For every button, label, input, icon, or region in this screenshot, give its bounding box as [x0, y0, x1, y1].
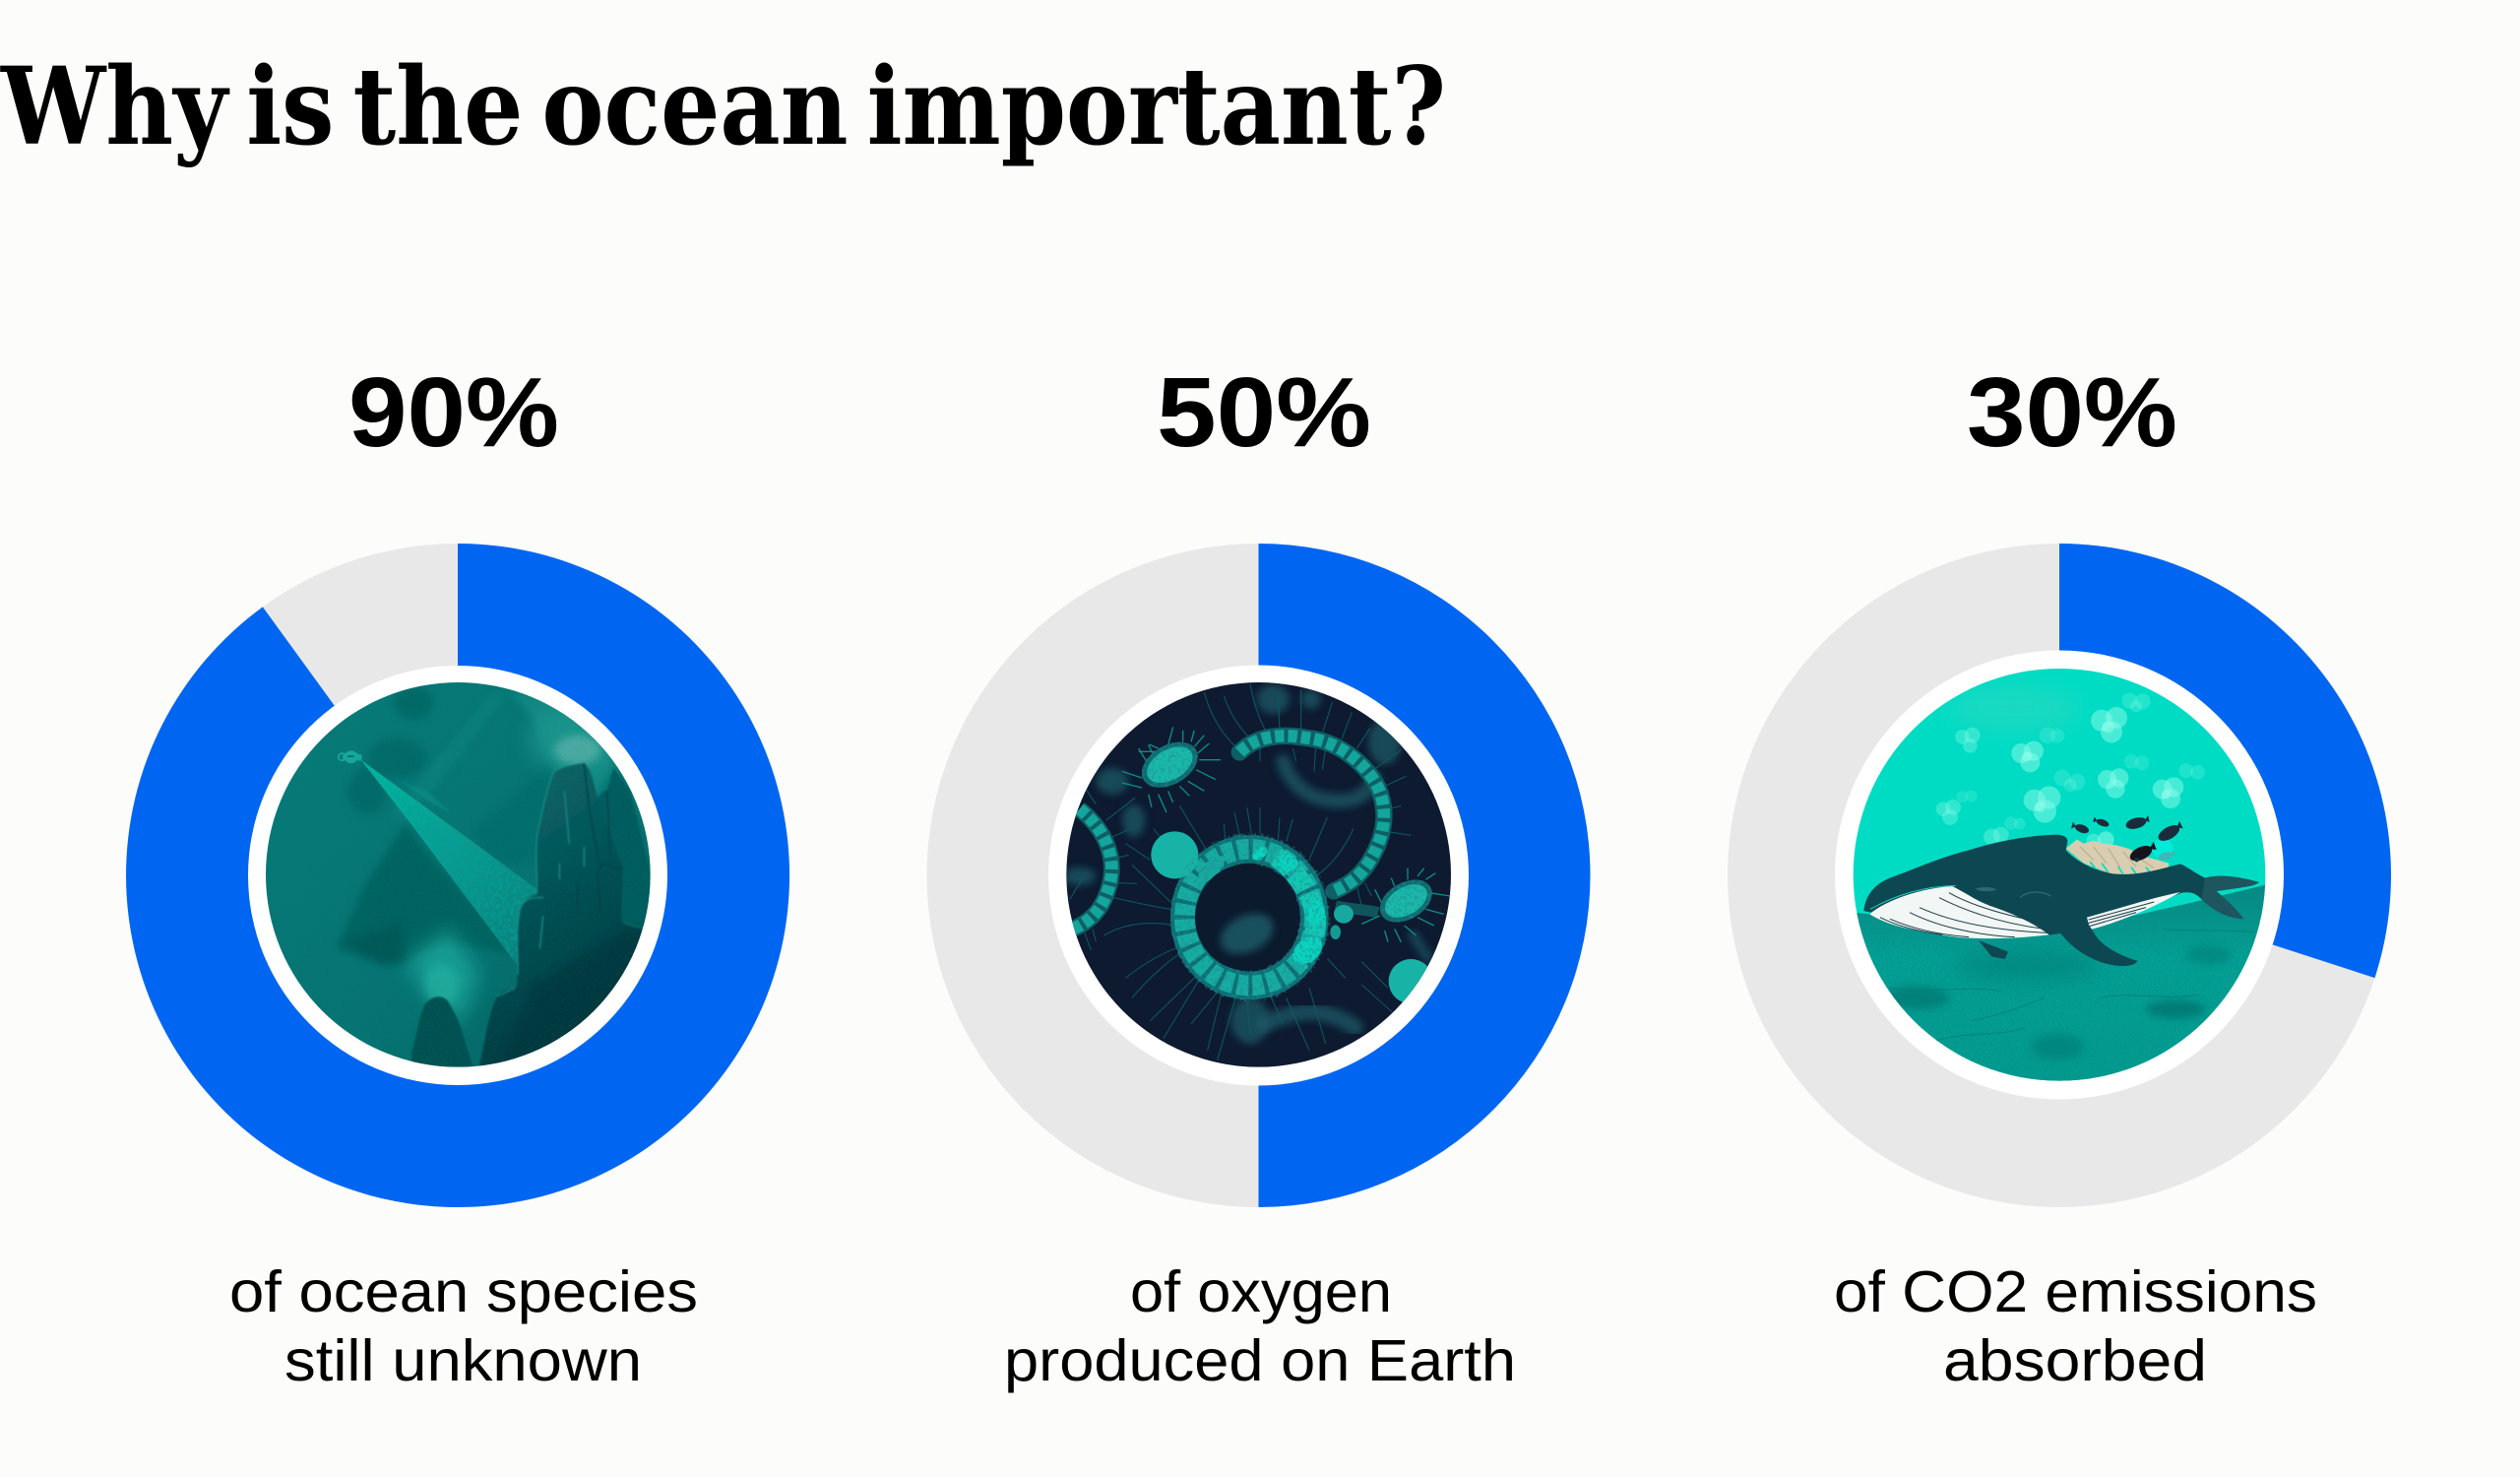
spiky cell right — [1361, 868, 1450, 942]
donut chart: 90% — [126, 544, 789, 1207]
stat: 50%: 50% — [1157, 357, 1371, 468]
panel: 90% ocean species — [126, 357, 789, 1393]
round cells — [1151, 831, 1433, 1003]
caption: still unknown — [284, 1328, 642, 1393]
body — [1863, 835, 2259, 935]
illustration: phytoplankton — [1063, 679, 1457, 1073]
whale — [1863, 835, 2259, 966]
highlights — [1250, 844, 1328, 970]
submersible — [339, 751, 361, 763]
top-right chain — [1239, 736, 1384, 891]
illustration: whale — [1851, 667, 2271, 1090]
spiky cell top-left — [1122, 727, 1221, 812]
panel: 30% CO2 — [1728, 357, 2391, 1393]
caption: of ocean species — [229, 1259, 698, 1324]
bubbles — [1936, 693, 2205, 859]
left chain — [1073, 809, 1111, 929]
tail shading — [2202, 876, 2259, 919]
skeleton — [2066, 840, 2169, 874]
title: Why is the ocean important? — [0, 43, 1446, 169]
rocks — [411, 763, 651, 1066]
donut chart: 30% — [1728, 544, 2391, 1207]
stat: 90%: 90% — [348, 357, 559, 468]
flipper — [2060, 926, 2138, 966]
fish — [2070, 814, 2185, 864]
caption: produced on Earth — [1004, 1328, 1516, 1393]
sea bed — [1851, 879, 2271, 1090]
donut chart: 50% — [927, 544, 1591, 1207]
caption: of CO2 emissions — [1834, 1259, 2317, 1324]
blurred background plankton — [1063, 684, 1401, 1044]
caption: absorbed — [1943, 1328, 2207, 1393]
belly — [1869, 886, 2049, 938]
central ring — [1184, 849, 1314, 986]
light beam — [361, 760, 536, 965]
stat: 30%: 30% — [1967, 357, 2177, 468]
inner hole — [1195, 865, 1271, 971]
panel: 50% oxygen — [927, 357, 1591, 1393]
caption: of oxygen — [1130, 1259, 1392, 1324]
illustration: deep sea submersible — [263, 679, 657, 1073]
hairs — [1070, 684, 1411, 1060]
small fin — [1979, 940, 2008, 959]
